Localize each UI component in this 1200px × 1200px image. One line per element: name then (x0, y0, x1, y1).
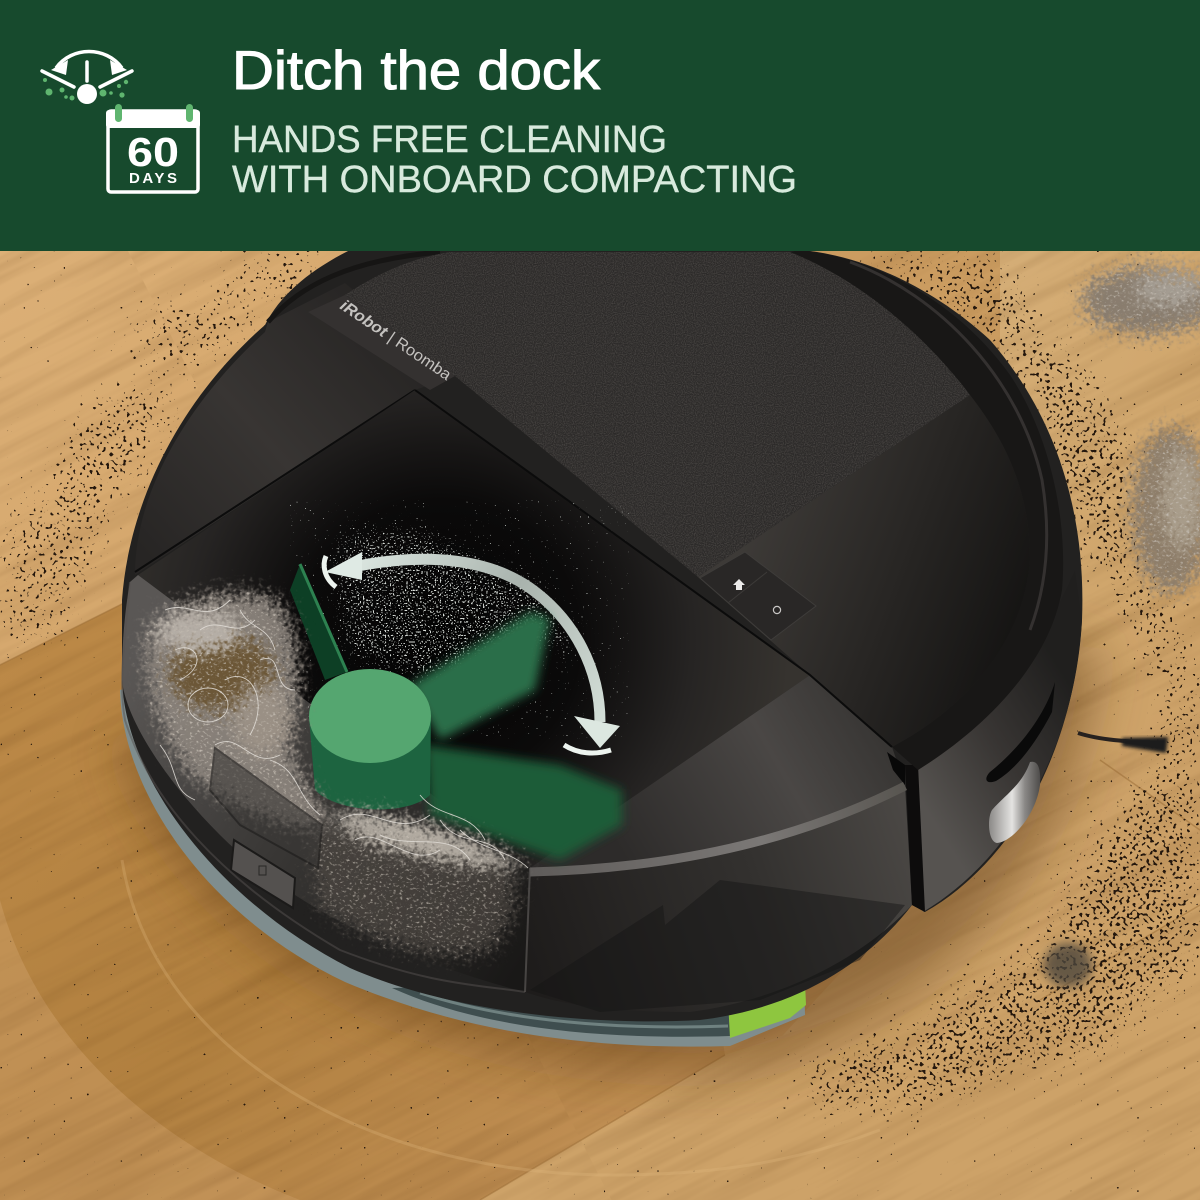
brand strip: iRobot | Roomba (337, 297, 454, 384)
hair strands (160, 600, 528, 868)
robot floor shadow (118, 600, 1100, 1070)
clear bin side wall (122, 575, 530, 992)
robot vacuum (120, 250, 1082, 1047)
compactor cylinder (309, 717, 431, 809)
control buttons (700, 552, 816, 640)
lid rim highlight (530, 786, 905, 872)
subtitle: WITH ONBOARD COMPACTING (232, 159, 797, 201)
right top panel (698, 395, 1030, 747)
icon: 60 days calendar: 60 (127, 129, 179, 175)
bin corner edge (525, 868, 530, 992)
subtitle (232, 119, 797, 201)
pet hair clump top right (1082, 266, 1200, 334)
pet hair clump right (1132, 428, 1200, 592)
blurred lower paddle (425, 745, 622, 860)
base ring and clear mop tray (120, 650, 805, 1047)
outer black ring (790, 250, 1063, 770)
rotating arrow (324, 552, 620, 753)
icon: rotating compactor (42, 52, 132, 104)
compactor top (309, 669, 431, 763)
main body silhouette (122, 250, 1082, 1021)
blurred upper paddle (410, 612, 550, 740)
rear top lid panel (135, 283, 455, 575)
dust smudge on floor (1044, 943, 1092, 987)
icon: 60 days calendar: DAYS (129, 170, 177, 187)
lime green mop tab (728, 982, 806, 1038)
lid front right facet (530, 675, 905, 868)
title: Ditch the dock (232, 39, 601, 101)
upright paddle (290, 564, 347, 680)
clear dust bin top (138, 390, 810, 868)
subtitle: HANDS FREE CLEANING (232, 119, 667, 161)
panel: wood floor background (0, 250, 1200, 1200)
speaker panel on bin wall (210, 748, 322, 868)
brand strip (308, 295, 455, 390)
compacted hair lower pile (310, 812, 525, 954)
icon: 60 days calendar (106, 104, 200, 192)
right side module (905, 570, 1082, 912)
fabric top cover (346, 252, 970, 577)
dust particles (335, 530, 580, 680)
floor debris speckles (0, 255, 1200, 1115)
notch between lid and module (887, 752, 905, 785)
front panel (525, 785, 912, 1012)
header band (0, 0, 1200, 251)
side brush (1078, 733, 1168, 753)
green paddles and compactor (290, 564, 622, 860)
compacted hair upper pile (146, 593, 330, 830)
bin button (231, 840, 295, 908)
